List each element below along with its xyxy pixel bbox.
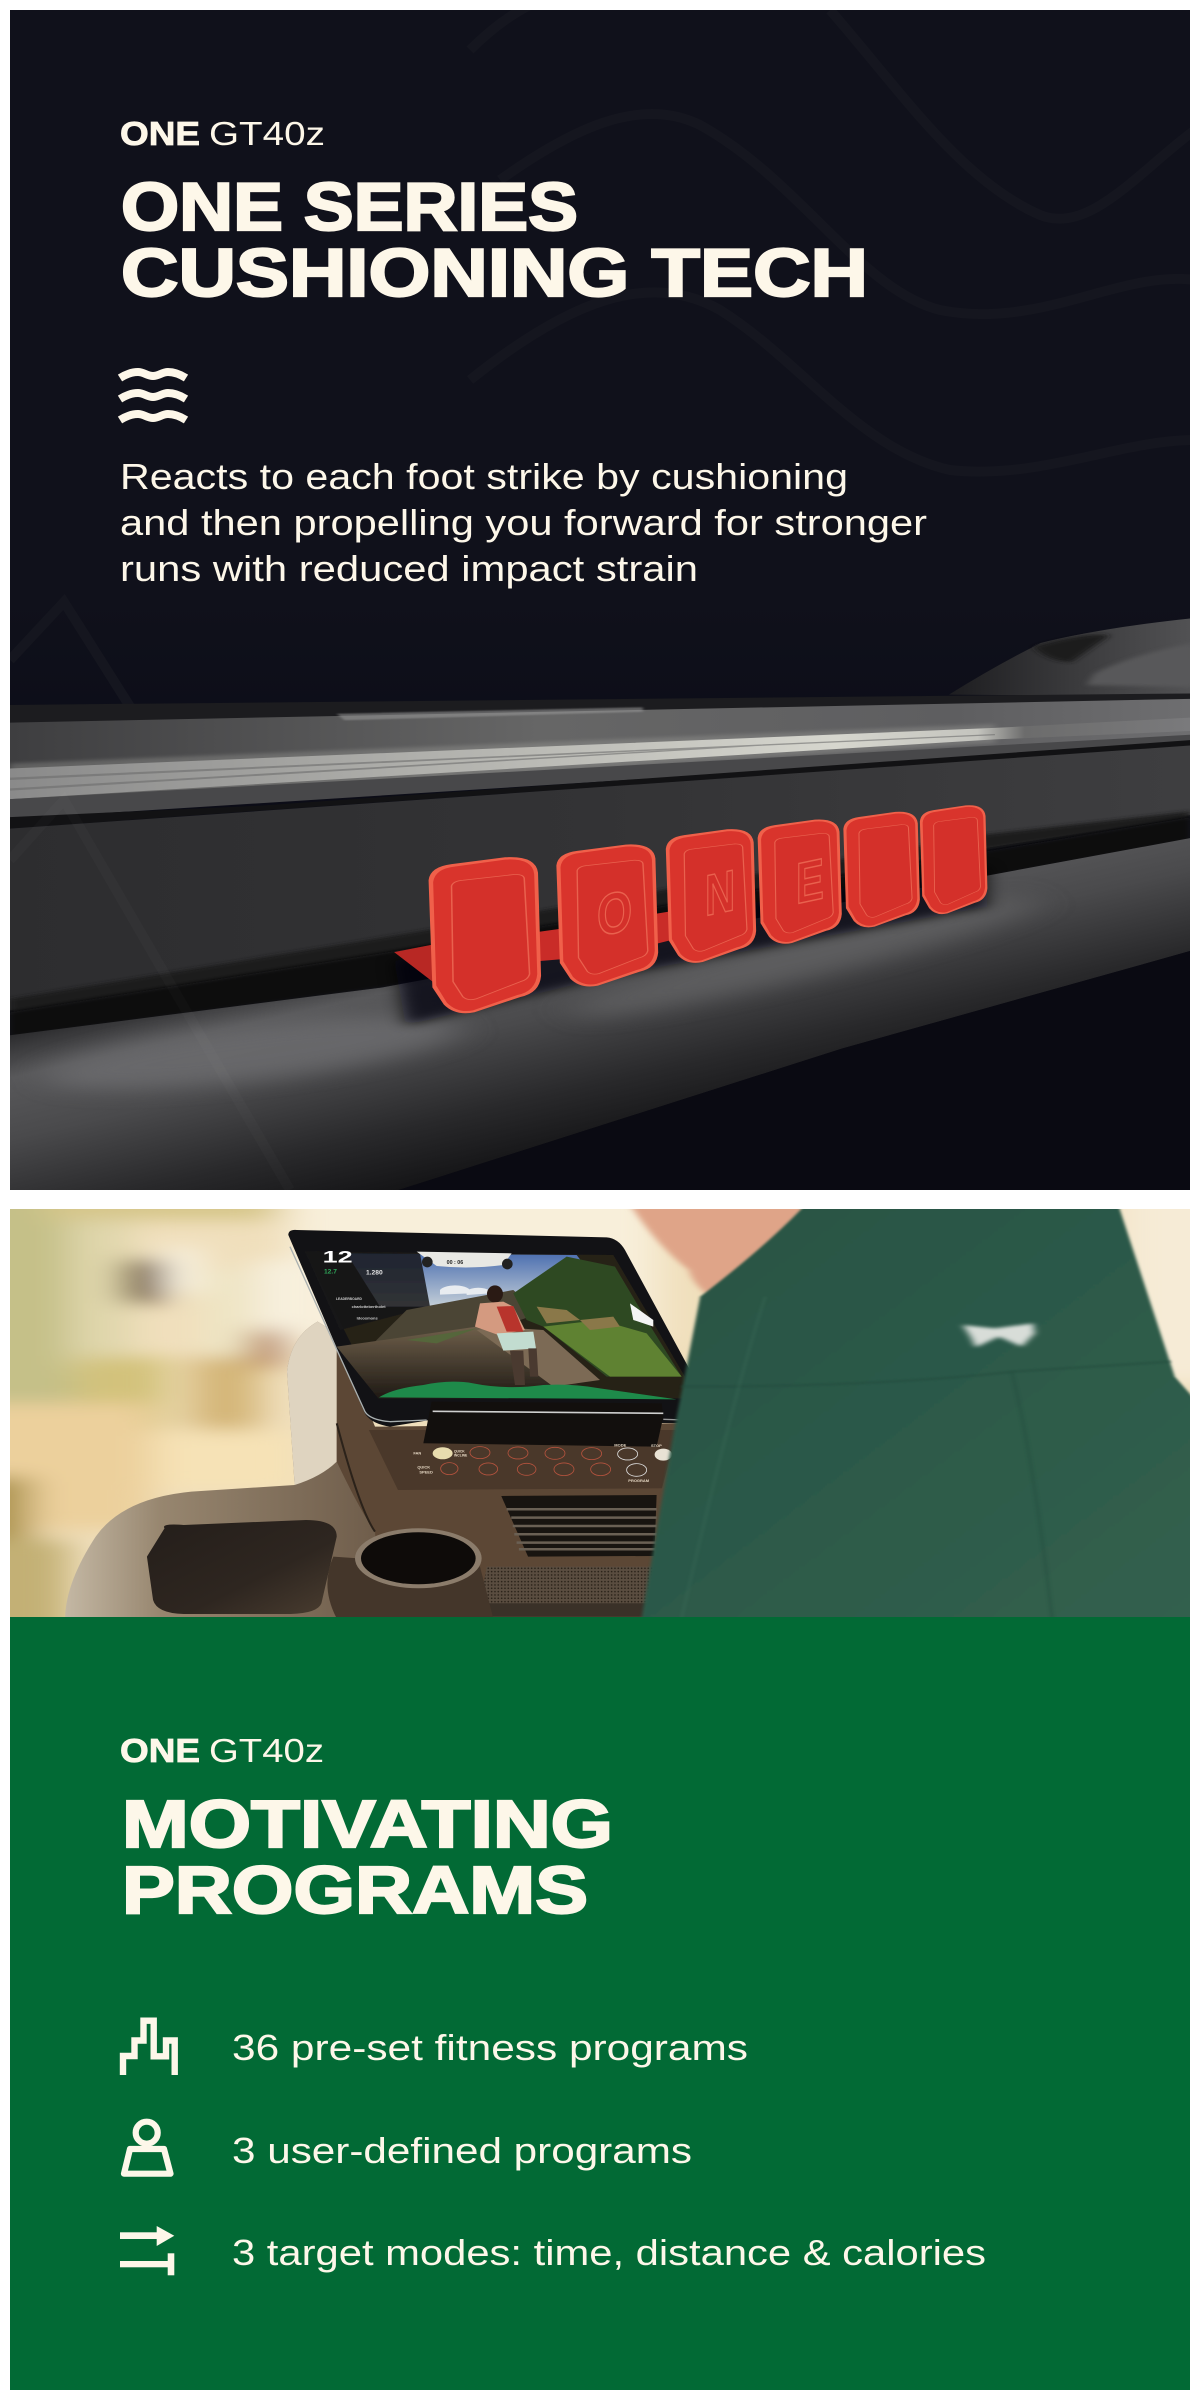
embossed letters on tabs: E bbox=[796, 846, 824, 917]
heading: motivating programs: MOTIVATING bbox=[122, 1787, 613, 1862]
treadmill photo bbox=[10, 618, 1194, 1190]
stats overlay: charlottebertholet bbox=[352, 1304, 386, 1309]
runner bbox=[475, 1285, 538, 1385]
stats overlay bbox=[323, 1248, 386, 1321]
keypad labels bbox=[413, 1443, 662, 1483]
timer card: 00 : 06 bbox=[447, 1260, 463, 1266]
list item: target modes: 3 target modes: time, distance & calories bbox=[232, 2232, 986, 2273]
keypad labels: INCLINE bbox=[454, 1454, 468, 1458]
lower rail bbox=[10, 838, 1190, 1190]
product label bbox=[120, 1732, 324, 1769]
stats overlay: Ideosmons bbox=[357, 1316, 378, 1321]
timer card bbox=[417, 1252, 513, 1269]
reflective stripe bbox=[10, 718, 1190, 804]
treadmill deck top bbox=[10, 695, 1190, 804]
product label: ONE bbox=[120, 1732, 200, 1769]
dark floor bbox=[972, 951, 1190, 1012]
panel: motivating programs bbox=[10, 1617, 1190, 2390]
background wave pattern bbox=[10, 5, 1195, 770]
elevation profile bbox=[379, 1382, 677, 1399]
speaker grille bbox=[473, 1567, 657, 1617]
stats overlay: 12.7 bbox=[324, 1268, 337, 1275]
keypad labels: SPEED bbox=[419, 1470, 433, 1475]
icon: user weight bbox=[124, 2122, 170, 2174]
icon: target arrow bbox=[120, 2226, 174, 2275]
heading: motivating programs: PROGRAMS bbox=[122, 1853, 588, 1928]
stats overlay: LEADERBOARD bbox=[336, 1297, 362, 1301]
list item: user programs: 3 user-defined programs bbox=[232, 2130, 692, 2171]
body text: runs with reduced impact strain bbox=[120, 548, 698, 589]
icon: skyline profile bbox=[123, 2021, 175, 2075]
red ONE tabs bbox=[394, 805, 987, 1013]
stats overlay: 12 bbox=[323, 1248, 353, 1267]
stats overlay: 1.280 bbox=[366, 1270, 383, 1277]
cup holder bbox=[327, 1528, 493, 1618]
tablet body bbox=[288, 1230, 690, 1427]
embossed letters on tabs bbox=[598, 858, 823, 934]
keypad labels: STOP bbox=[651, 1443, 662, 1448]
console bump bbox=[949, 618, 1194, 697]
product label bbox=[120, 115, 325, 152]
rail shadow bbox=[11, 817, 1189, 1015]
heading: cushioning tech: CUSHIONING TECH bbox=[121, 235, 868, 311]
hand bbox=[631, 1207, 807, 1295]
product label: GT40z bbox=[209, 115, 325, 152]
console base bbox=[65, 1322, 681, 1620]
body text: and then propelling you forward for stronger bbox=[120, 502, 927, 543]
embossed letters on tabs: O bbox=[597, 879, 632, 949]
product label: GT40z bbox=[209, 1732, 324, 1769]
keypad panel bbox=[369, 1430, 677, 1490]
vent bbox=[501, 1495, 657, 1557]
body text: Reacts to each foot strike by cushioning bbox=[120, 456, 848, 497]
lifestyle photo bbox=[10, 1209, 1190, 1617]
tablet stand bbox=[423, 1402, 685, 1447]
faint triangle overlay bbox=[10, 800, 290, 1190]
keypad buttons bbox=[433, 1447, 672, 1476]
list item: pre-set programs: 36 pre-set fitness programs bbox=[232, 2027, 748, 2068]
keypad labels: QUICK bbox=[417, 1465, 430, 1470]
embossed letters on tabs: N bbox=[705, 857, 735, 929]
heading: cushioning tech bbox=[121, 169, 868, 311]
keypad labels: MODE bbox=[614, 1443, 627, 1448]
icon: waves bbox=[120, 372, 186, 420]
heading: cushioning tech: ONE SERIES bbox=[121, 169, 578, 245]
side band bbox=[10, 746, 1190, 1010]
tablet screen bbox=[305, 1248, 685, 1399]
blurred background bbox=[10, 1209, 1190, 1617]
product label: ONE bbox=[120, 115, 200, 152]
keypad labels: QUICK bbox=[454, 1450, 465, 1454]
legging logo bbox=[963, 1323, 1035, 1347]
tray recess bbox=[147, 1520, 337, 1614]
deck edge bbox=[10, 735, 1190, 819]
keypad labels: FAN bbox=[413, 1451, 421, 1456]
body text bbox=[120, 456, 927, 589]
leggings bbox=[641, 1207, 1195, 1620]
tab shadow bbox=[394, 865, 987, 1026]
keypad labels: PROGRAM bbox=[628, 1478, 650, 1483]
heading: motivating programs bbox=[122, 1787, 613, 1928]
panel: cushioning tech bbox=[10, 5, 1195, 1190]
